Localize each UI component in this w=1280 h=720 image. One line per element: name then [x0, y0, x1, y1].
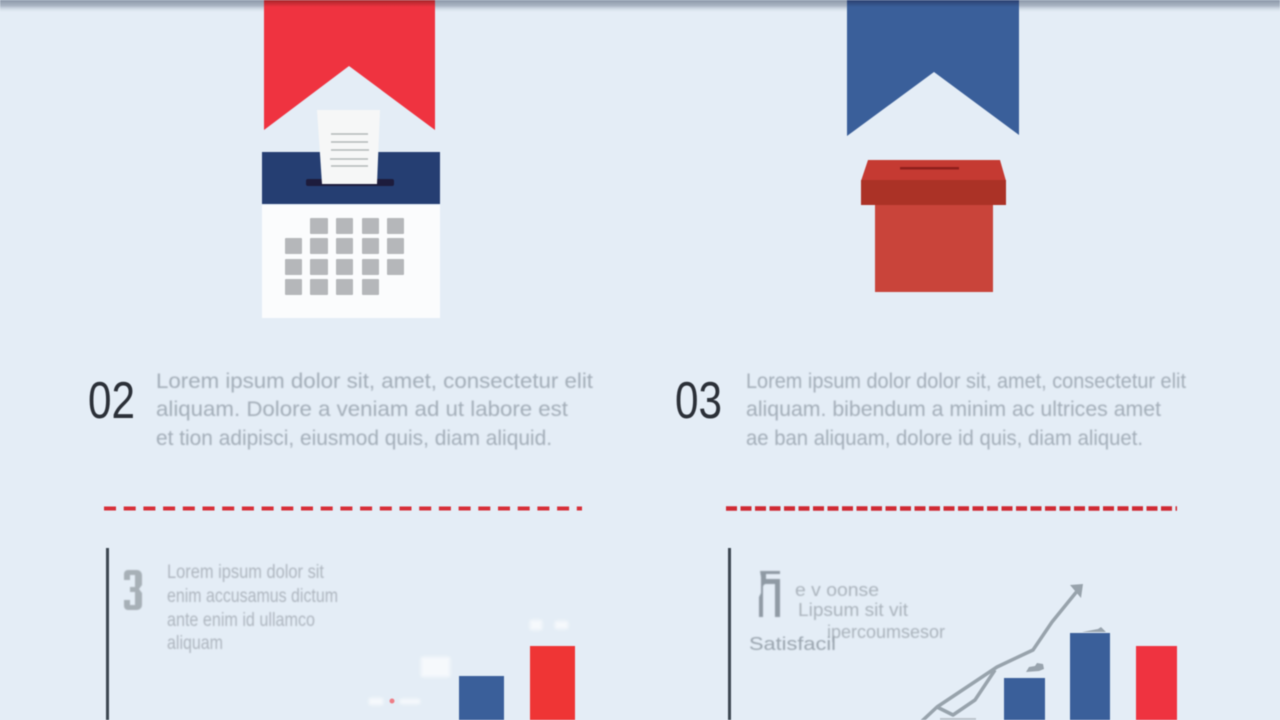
text block: enim accusamus dictum	[167, 586, 338, 607]
arrow head	[1070, 584, 1083, 598]
text block: step 02	[156, 370, 593, 450]
calendar header	[262, 152, 440, 204]
box slot	[900, 167, 959, 170]
text block: ipercoumsesor	[827, 622, 945, 642]
box lid front	[861, 180, 1006, 205]
ballot paper	[317, 110, 380, 184]
text block: ante enim id ullamco	[167, 610, 315, 631]
text block: e v oonse	[795, 580, 879, 600]
text block: Satisfacil	[749, 634, 836, 654]
ribbon: red	[264, 0, 435, 130]
box body	[875, 205, 993, 292]
bar: blue short	[1004, 678, 1045, 720]
text block: step 03: ae ban aliquam, dolore id quis, diam aliquet.	[746, 427, 1143, 450]
red marker	[390, 698, 394, 704]
axis line	[728, 548, 731, 720]
text block: step 02: aliquam. Dolore a veniam ad ut labore est	[156, 398, 568, 421]
bar caps	[1026, 663, 1044, 672]
text block: step 02: Lorem ipsum dolor sit, amet, consectetur elit	[156, 370, 593, 393]
step number 03: 03	[675, 372, 722, 430]
chart: right bars	[940, 627, 1177, 720]
icon: ballot calendar	[262, 110, 440, 318]
bar: blue	[459, 676, 504, 720]
bar: red	[1136, 646, 1177, 720]
divider right	[726, 506, 1177, 511]
divider left	[104, 506, 582, 510]
ribbon: blue	[847, 0, 1019, 136]
text block	[749, 580, 945, 654]
bar: blue tall	[1070, 633, 1110, 720]
bar: red	[530, 646, 575, 720]
text block	[167, 562, 338, 654]
trend arrow	[921, 584, 1083, 720]
large glyph	[759, 571, 780, 617]
text block: step 03: aliquam. bibendum a minim ac ultrices amet	[746, 398, 1161, 421]
text block: Lipsum sit vit	[798, 600, 908, 620]
axis line	[106, 548, 109, 720]
faded chart marks	[369, 620, 568, 705]
ballot slot	[306, 179, 394, 186]
icon: red ballot box	[861, 160, 1006, 292]
small grey bar	[940, 718, 976, 720]
calendar date grid	[285, 218, 404, 295]
panel: right lower section	[728, 548, 1177, 720]
icon: grey number	[124, 570, 142, 610]
step number 02: 02	[88, 372, 135, 430]
calendar body	[262, 205, 440, 318]
panel: left lower section	[106, 548, 575, 720]
box lid top	[861, 160, 1006, 181]
text block: step 02: et tion adipisci, eiusmod quis, diam aliquid.	[156, 427, 552, 450]
text block: Lorem ipsum dolor sit	[167, 562, 325, 583]
chart: left bars	[369, 620, 575, 720]
text block: step 03: Lorem ipsum dolor dolor sit, amet, consectetur elit	[746, 370, 1186, 393]
text block: aliquam	[167, 633, 223, 654]
text block: step 03	[746, 370, 1186, 450]
